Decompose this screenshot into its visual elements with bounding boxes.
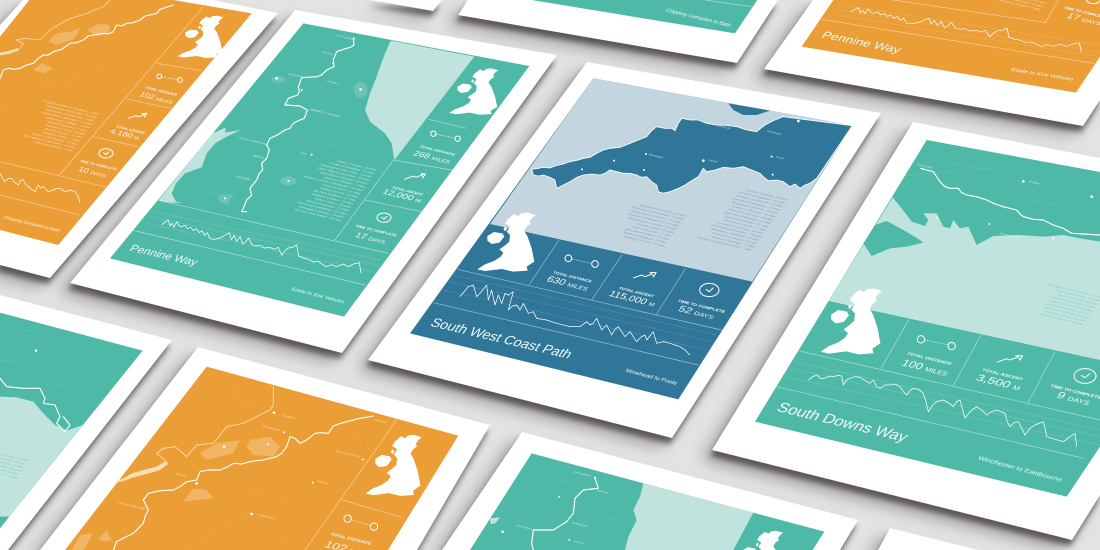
stage list: right column: Salcombe to Dartmouth - 21 miles [723,211,772,225]
poster: teal Pennine Way: Kirk Yetholm [335,34,355,41]
stage list: Cold Ashton to Bath - 7 miles [33,140,75,153]
stage list: Steyning to Pyecombe - 10 miles [1045,302,1092,316]
stage list: Middleton to Dufton - 21 miles [311,192,355,205]
icon: UK map [477,213,536,272]
stage list: right column: St Ives to Penzance - 24 miles [745,188,789,202]
poster: teal Pennine Way: Byrness [321,50,335,56]
poster: orange Pennine Way, top right [764,0,1100,126]
stage list: left column: Westward Ho! to Clovelly - 11 miles [627,216,678,231]
icon: distance [917,336,955,350]
sea [0,397,83,517]
route line [0,5,173,78]
stage list: left column: Padstow to Newquay - 16 miles [623,231,668,244]
poster: orange Chipping Campden to Bath, bottom: Chipping [373,418,387,424]
icon: UK map [366,435,422,496]
stage list: Wotton to Old Sodbury - 12 miles [32,132,79,146]
stat: total distance: 102 MILES [138,91,176,106]
subtitle: Minehead to Poole [624,369,679,387]
stat: time to complete [1049,384,1100,408]
icon: clock [377,213,391,222]
stage list: Broadway to Winchcombe - 12 miles [46,104,98,119]
stat: total distance: 268 MILES [412,149,453,165]
poster: teal Pennine Way: Standedge [234,174,252,181]
sea [625,483,753,550]
stat: time to complete: TIME TO COMPLETE [677,299,727,314]
poster: teal South Downs Way: Bognor Regis [999,232,1021,239]
stage list: left column: Lynmouth to Combe Martin - 13 miles [631,205,685,221]
poster: orange Chipping Campden to Bath, bottom: Dursley [174,472,188,478]
stat: total distance [412,145,456,165]
poster: teal Pennine Way, bottom: Bellingham [571,521,589,528]
stage list: left column: Combe Martin to Braunton - 23 miles [630,209,682,224]
stage list: Dufton to Alston - 20 miles [314,197,352,209]
stage list: Byrness to Kirk Yetholm - 25 miles [294,208,343,222]
route line [0,378,70,432]
elevation chart [0,173,80,203]
stage list: Calder Valley to Ickornshaw - 15 miles [317,166,371,182]
stage list: right column: Falmouth to Mevagissey - 20 miles [732,197,782,212]
poster: blue South West Coast Path [368,62,881,438]
Wales coast [728,103,770,115]
stage list: Stroud to Dursley - 11 miles [44,127,84,139]
stage list: Standedge to Calder Valley - 13 miles [320,163,373,179]
stage list: Winchcombe to Cleeve Hill - 7 miles [44,108,96,123]
stat: total distance: TOTAL DISTANCE [419,145,456,157]
subtitle: Chipping Campden to Bath [3,215,61,233]
stat: total distance: TOTAL DISTANCE [144,86,179,97]
icon: clock [99,149,113,158]
stage list: Gargrave to Malham - 7 miles [323,176,366,189]
stage list: Alston to Greenhead - 17 miles [305,199,350,212]
poster: teal Pennine Way: York [299,151,308,156]
stat: total distance [544,270,593,293]
poster: orange Chipping Campden to Bath, bottom: Wotton under Edge [118,501,147,511]
stage list: right column: Polperro to Plymouth - 25 miles [732,205,777,218]
icon: UK map [734,531,783,550]
stage list: Horton to Hawes - 14 miles [322,183,362,195]
stat: total ascent: TOTAL ASCENT [981,368,1025,381]
stat: time to complete: 17 DAYS [353,231,389,245]
poster: teal Pennine Way, bottom: Greenhead [515,524,533,531]
stage list: right column: Weymouth to Lulworth - 12 miles [711,231,758,245]
stage list: right column: Abbotsbury to Weymouth - 15 miles [710,227,761,242]
stage list: Old Sodbury to Cold Ashton - 10 miles [22,134,77,149]
stage list: Crowden to Standedge - 11 miles [328,161,376,175]
stage list: Amberley to Steyning - 10 miles [1049,299,1094,313]
poster: blue South West Coast Path: Minehead [766,129,782,136]
stage list: Malham to Horton in Ribblesdale - 15 miles [303,175,364,192]
stage list: Painswick to Stroud - 6 miles [44,123,86,136]
stage list: Pyecombe to Rodmell - 13 miles [1043,306,1090,319]
stat: total ascent: 4,160 M [108,127,142,141]
stage list: right column: Lyme Regis to Abbotsbury - 19 miles [711,223,763,239]
town labels [936,180,1093,239]
stage list: right column: Plymouth to Salcombe - 29 miles [727,208,775,222]
stat: total ascent: TOTAL ASCENT [115,125,146,135]
stat: total distance: 630 MILES [544,275,591,293]
stat: total ascent: TOTAL ASCENT [618,286,656,298]
stage list: right column: Exmouth to Lyme Regis - 28 miles [716,221,765,235]
stat: time to complete: TIME TO COMPLETE [79,159,118,171]
icon: distance [565,255,598,267]
stat: total distance: 100 MILES [899,358,951,378]
elevation chart [851,8,1081,52]
elevation chart [460,285,690,355]
estuary [117,461,168,483]
stage list: Cocking to Amberley - 12 miles [1052,296,1097,309]
title: Pennine Way [127,242,201,268]
poster: blue South West Coast Path: Lynmouth [716,124,732,130]
route line [242,38,354,212]
stage list: Dursley to Wotton - 7 miles [42,131,82,143]
poster: teal Chipping Campden to Bath, top centre [458,0,778,63]
stage list: Ickornshaw to Gargrave - 16 miles [319,171,369,185]
town markers [581,120,800,176]
stage list: Birdlip to Painswick - 7 miles [47,120,89,133]
poster: orange Chipping Campden to Bath, bottom: Swindon [316,479,330,485]
route line [113,416,373,550]
title: Pennine Way [819,29,904,56]
poster: orange Chipping Campden to Bath, bottom: Winchcombe [261,424,281,432]
poster: teal Pennine Way: Horton in Ribblesdale [238,136,270,146]
stage list: Cleeve Hill to Leckhampton - 9 miles [41,111,93,126]
stat: time to complete: TIME TO COMPLETE [1049,384,1100,400]
poster: blue South West Coast Path: Yeovil [774,155,785,160]
stat: total ascent: 115,000 M [606,290,658,309]
icon: clock [1074,369,1096,383]
title: South West Coast Path [427,316,575,362]
route line [532,478,598,550]
stage list: right column: Penzance to Porthleven - 13 miles [737,190,786,205]
stat: time to complete [1063,5,1100,27]
poster: teal Pennine Way: Malham [252,154,266,160]
sea [829,197,1100,360]
stat: time to complete: TIME TO COMPLETE [354,224,398,237]
poster: orange Chipping Campden to Bath, bottom: Evesham [281,414,297,420]
stat: total distance [138,86,179,106]
town labels [501,477,596,541]
subtitle: Edale to Kirk Yetholm [1010,68,1075,82]
icon: distance [344,515,378,530]
poster fragment: top edge [370,0,442,11]
Isle of Wight [863,221,923,256]
poster: teal South Downs Way, left edge [0,295,172,550]
stat: time to complete [76,159,118,179]
stage list: left column: Newquay to St Ives - 37 miles [623,235,666,248]
stat: total distance [899,351,953,378]
poster: teal South Downs Way: Winchester [916,163,934,169]
stage list: left column: Braunton to Westward Ho! - 28 miles [627,212,680,228]
stat: total distance: TOTAL DISTANCE [552,270,593,283]
stat: time to complete: 9 DAYS [1054,390,1093,408]
title: South Downs Way [774,400,912,445]
poster: orange Chipping Campden to Bath, top left [0,0,278,278]
sea: east coast [365,41,474,160]
route line [921,168,1100,235]
stat: time to complete: 10 DAYS [76,165,109,179]
icon: clock [1086,0,1100,4]
stat: total ascent: 3,500 M [973,373,1024,393]
stage list: right column: Swanage to South Haven Point - 7 miles [696,235,754,252]
poster: orange Chipping Campden to Bath, bottom: Stow on the Wold [334,449,361,458]
stage list: Greenhead to Bellingham - 22 miles [296,201,348,216]
stat: total distance: TOTAL DISTANCE [329,532,372,545]
stage list: Beacon Hill to Buriton - 10 miles [1055,289,1100,303]
stage list: Alfriston to Eastbourne - 11 miles [1038,312,1085,326]
stat: time to complete: 17 DAYS [1065,11,1100,27]
stat: total ascent [973,368,1025,393]
icon: distance [157,74,182,82]
stage list: right column: Dartmouth to Brixham - 11 miles [724,215,770,228]
stat: time to complete [676,299,727,321]
subtitle: Edale to Kirk Yetholm [290,287,346,305]
poster: teal Pennine Way: Greenhead [288,72,306,79]
poster: teal Pennine Way [70,10,557,353]
poster: blue South West Coast Path: Exeter [708,158,719,164]
stat: total ascent [108,125,146,141]
stat: total ascent: 12,000 M [381,187,424,204]
icon: ascent arrow [404,174,425,179]
stage list: Tan Hill to Middleton - 17 miles [313,189,357,202]
sea: west coast [158,127,241,203]
icon: UK map [449,68,498,115]
stage list: right column: Brixham to Exmouth - 27 miles [723,218,768,232]
icon: ascent arrow [633,273,656,278]
stage list: Leckhampton to Birdlip - 8 miles [45,116,91,129]
stage list: Bellingham to Byrness - 15 miles [298,205,345,219]
subtitle: Chipping Campden to Bath [664,8,732,28]
sea [490,78,852,282]
stage list: right column: Lulworth to Swanage - 20 miles [711,235,756,249]
stage list: Rodmell to Alfriston - 11 miles [1044,310,1087,323]
subtitle: Winchester to Eastbourne [976,456,1064,483]
elevation chart [808,375,1077,447]
icon: UK map [821,288,882,354]
icon: UK map [178,16,223,58]
stage list: Hawes to Tan Hill - 16 miles [319,186,359,199]
poster: teal South Downs Way: Guildford [1028,180,1043,186]
stat: total distance [322,532,377,550]
poster: teal Pennine Way, bottom: Hexham [573,539,587,545]
town labels [195,411,364,515]
poster: teal Pennine Way, bottom: Kirk Yetholm [573,470,593,478]
icon: ascent arrow [997,356,1023,362]
icon: distance [431,131,460,141]
stat: total ascent: TOTAL ASCENT [391,186,425,197]
stat: total distance: TOTAL DISTANCE [906,351,953,366]
stat: time to complete: 52 DAYS [676,305,717,321]
stage list: right column: Mevagissey to Polperro - 18 miles [731,201,779,215]
poster: teal Pennine Way, bottom: Byrness [596,489,610,495]
stage list: Chipping Campden to Broadway - 6 miles [41,99,100,116]
icon: ascent arrow [128,113,147,118]
map: south west peninsula [532,117,852,193]
stat: time to complete [353,224,398,245]
poster: orange Chipping Campden to Bath, bottom [40,347,490,550]
stage list: Buriton to Cocking - 11 miles [1057,293,1099,306]
stage list: left column: Boscastle to Padstow - 23 miles [625,227,671,241]
stage list: Edale to Crowden - 16 miles [337,159,378,172]
poster corner, bottom right [878,528,978,550]
stage list: right column: Porthleven to Falmouth - 24 miles [736,194,784,208]
poster: orange Chipping Campden to Bath, bottom: Chippenham [256,513,276,520]
stage list: left column: Clovelly to Bude - 25 miles [636,222,675,234]
poster: teal Pennine Way, bottom [442,432,858,550]
poster: teal Pennine Way: Middleton in Teesdale [309,108,342,118]
poster: teal South Downs Way [712,122,1100,540]
poster: teal Pennine Way: Hexham [326,79,340,85]
national parks [218,76,367,205]
stage list: left column: Bude to Boscastle - 17 miles [632,225,673,238]
icon: clock [700,283,719,297]
river [157,387,273,462]
poster: blue South West Coast Path: Barnstaple [648,153,665,159]
stage list: left column: Minehead to Lynmouth - 20 miles [639,203,687,218]
town labels [224,37,362,199]
elevation chart [162,220,361,273]
